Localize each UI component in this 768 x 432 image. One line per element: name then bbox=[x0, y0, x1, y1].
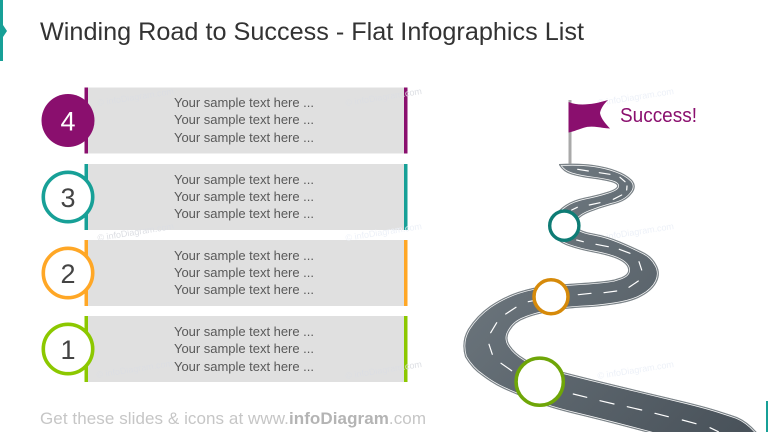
panel: step 4: Your sample text here ... bbox=[174, 112, 314, 127]
bottom-right accent bbox=[766, 401, 768, 432]
watermarks: © infoDiagram.com bbox=[345, 86, 423, 108]
watermarks: © infoDiagram.com bbox=[345, 221, 423, 243]
panel: step 4: 4 bbox=[60, 106, 76, 136]
title: Winding Road to Success - Flat Infographics List bbox=[40, 18, 584, 46]
panel: step 4 bbox=[42, 88, 408, 154]
watermarks bbox=[96, 86, 675, 381]
panel: step 3: Your sample text here ... bbox=[174, 189, 314, 204]
watermarks: © infoDiagram.com bbox=[96, 358, 174, 380]
watermarks: © infoDiagram.com bbox=[597, 86, 675, 108]
panel: step 4: Your sample text here ... bbox=[174, 95, 314, 110]
panel: step 1: Your sample text here ... bbox=[174, 359, 314, 374]
road milestone: green bbox=[516, 358, 563, 405]
panel: step 3: Your sample text here ... bbox=[174, 172, 314, 187]
success label: Success! bbox=[620, 105, 697, 127]
footer: Get these slides & icons at www.infoDiagram.com bbox=[40, 409, 426, 428]
panel: step 4: Your sample text here ... bbox=[174, 130, 314, 145]
watermarks: © infoDiagram.com bbox=[597, 221, 675, 243]
road milestone: orange bbox=[534, 280, 568, 314]
panel: step 2: Your sample text here ... bbox=[174, 265, 314, 280]
watermarks: © infoDiagram.com bbox=[97, 86, 175, 108]
panel: step 1 bbox=[43, 316, 408, 382]
panel: step 2: 2 bbox=[60, 259, 76, 289]
winding road bbox=[463, 164, 760, 432]
panel: step 2 bbox=[43, 240, 408, 306]
road milestone: teal bbox=[550, 211, 579, 240]
panel: step 3: 3 bbox=[60, 183, 76, 213]
watermarks: © infoDiagram.com bbox=[345, 359, 423, 381]
panel: step 1: Your sample text here ... bbox=[174, 324, 314, 339]
watermarks: © infoDiagram.com bbox=[97, 221, 175, 243]
watermarks: © infoDiagram.com bbox=[597, 359, 675, 381]
panel: step 3 bbox=[43, 164, 408, 230]
panel: step 2: Your sample text here ... bbox=[174, 248, 314, 263]
panel: step 1: 1 bbox=[60, 335, 76, 365]
icon: flag pole bbox=[568, 100, 572, 164]
panel: step 2: Your sample text here ... bbox=[174, 282, 314, 297]
panel: step 3: Your sample text here ... bbox=[174, 206, 314, 221]
panel: step 1: Your sample text here ... bbox=[174, 341, 314, 356]
top-left accent marker bbox=[0, 0, 7, 61]
icon: success flag bbox=[568, 100, 610, 132]
